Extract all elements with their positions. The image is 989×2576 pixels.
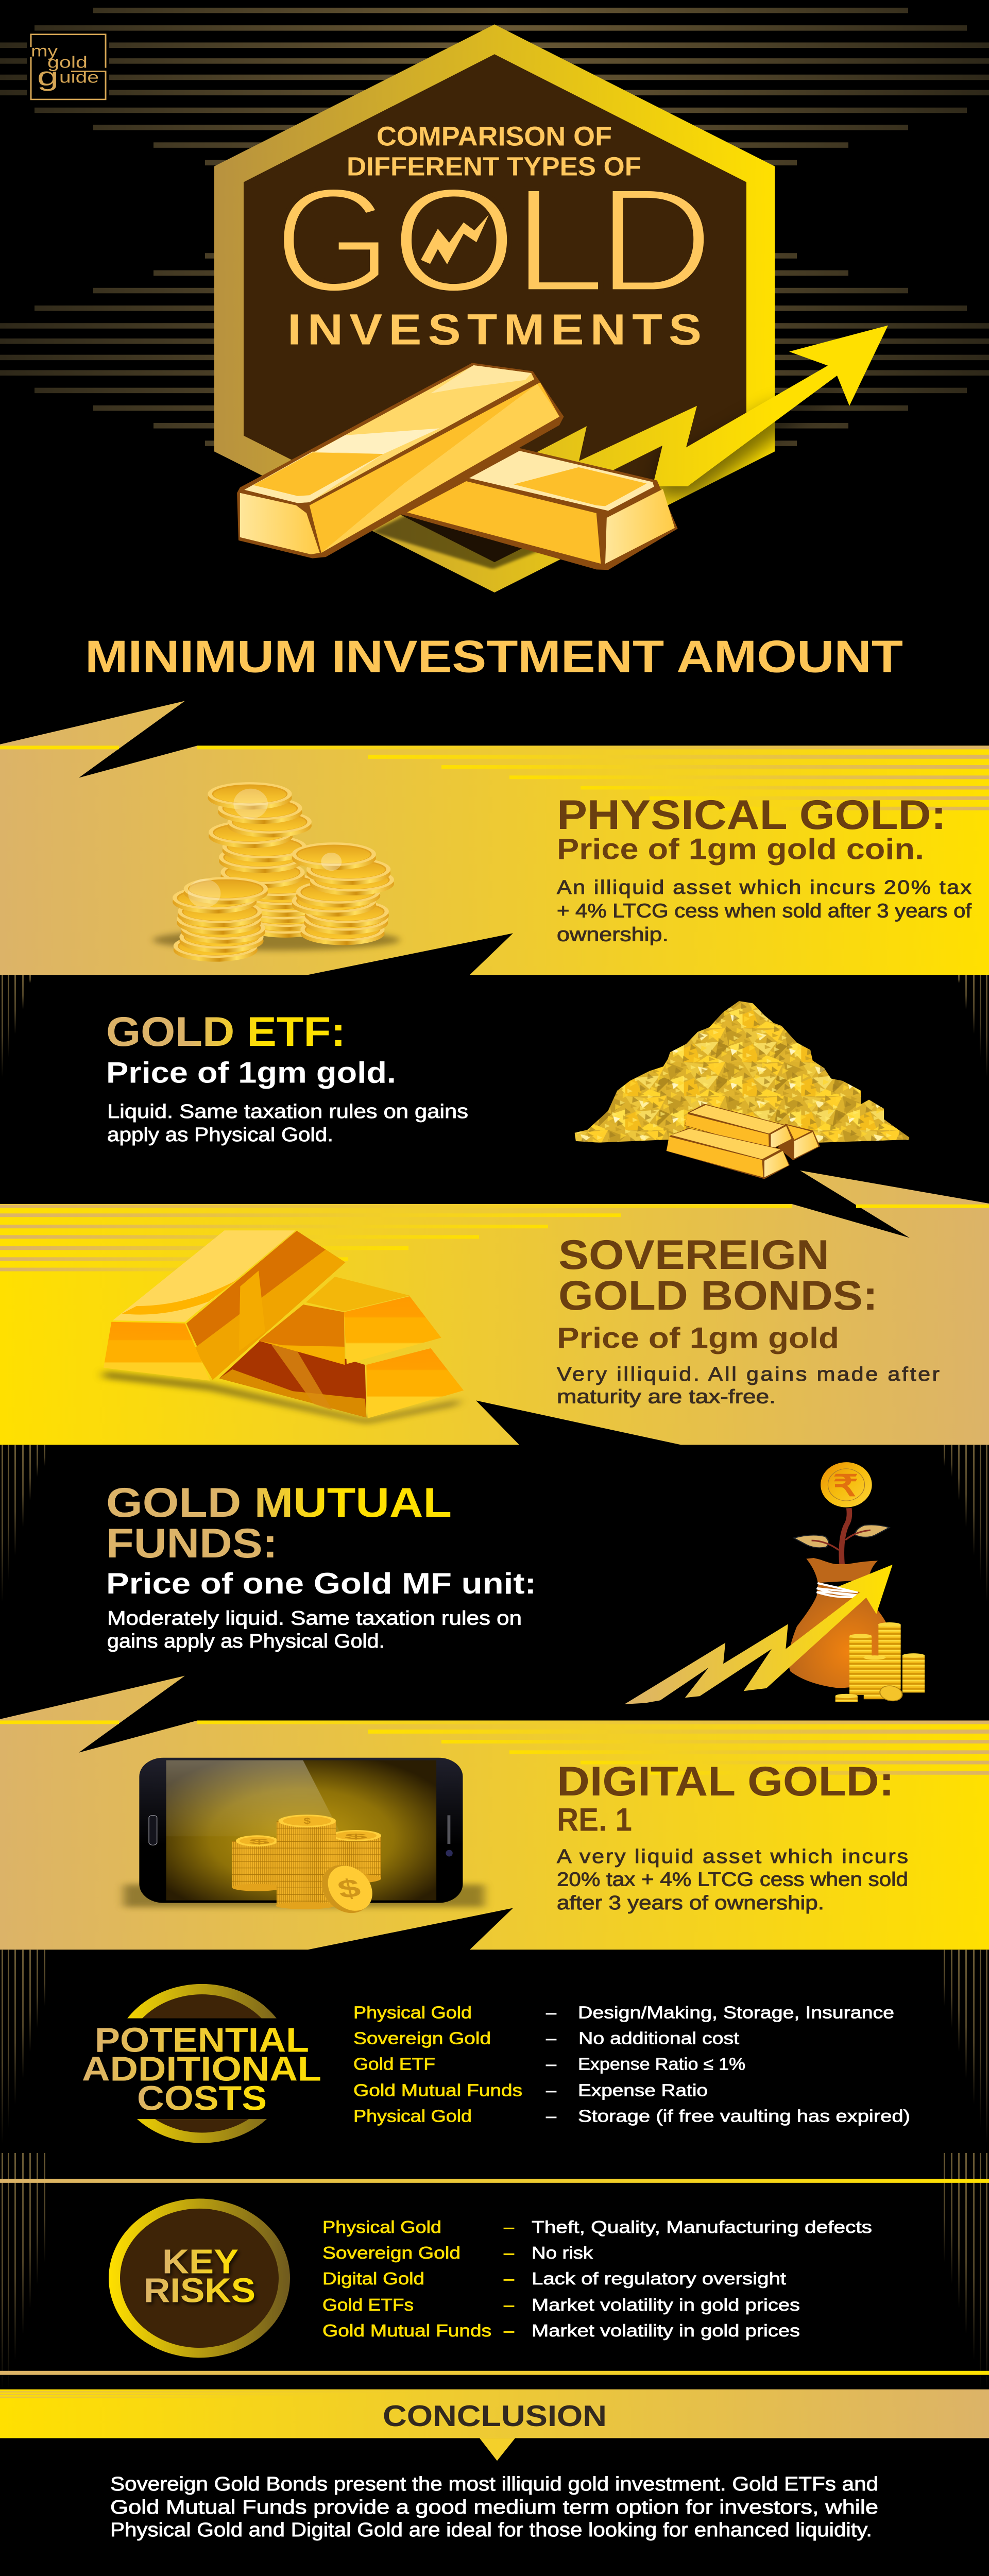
divider bar bbox=[0, 2371, 989, 2375]
badge title: KEY bbox=[162, 2243, 238, 2281]
subheading: price: Price of 1gm gold coin. bbox=[557, 833, 924, 866]
gold bar: upper bbox=[237, 363, 564, 558]
list: gold types bbox=[353, 2003, 522, 2126]
title: GOLD: G bbox=[274, 157, 392, 323]
coin stack: left bbox=[232, 1835, 282, 1891]
icon: stacks of gold coins bbox=[153, 782, 400, 962]
icon: phone with coins bbox=[124, 1758, 484, 1917]
panel: key risks bbox=[109, 2199, 872, 2358]
panel: digital gold bbox=[0, 1676, 989, 1950]
subheading: price: Price of 1gm gold. bbox=[106, 1056, 396, 1090]
description bbox=[107, 1607, 522, 1652]
description: gains apply as Physical Gold. bbox=[107, 1630, 385, 1652]
heading: physical gold: PHYSICAL GOLD: bbox=[557, 792, 946, 838]
conclusion text: Physical Gold and Digital Gold are ideal for those looking for enhanced liquidity. bbox=[110, 2518, 872, 2540]
list: dashes: – bbox=[504, 2295, 514, 2315]
vertical lines under sovereign gold bonds bbox=[2, 1445, 987, 1602]
description: A very liquid asset which incurs bbox=[557, 1845, 908, 1867]
coin: leaning bbox=[314, 1861, 379, 1917]
list: gold types bbox=[322, 2217, 491, 2341]
heading: sovereign gold bonds: SOVEREIGN bbox=[558, 1232, 829, 1278]
description: Liquid. Same taxation rules on gains bbox=[107, 1100, 468, 1123]
list: gold types: Physical Gold bbox=[322, 2217, 441, 2237]
title: comparison of: COMPARISON OF bbox=[377, 121, 612, 151]
list: gold types: Gold Mutual Funds bbox=[353, 2081, 522, 2100]
gold bar: lower bbox=[400, 448, 678, 570]
title: GOLD bbox=[274, 157, 714, 323]
heading: gold mutual funds: FUNDS: bbox=[106, 1520, 278, 1567]
coin: leaning: $ bbox=[334, 1873, 364, 1904]
title: GOLD: L bbox=[512, 157, 606, 323]
panel: gold mutual funds bbox=[106, 1462, 925, 1704]
conclusion text: Sovereign Gold Bonds present the most illiquid gold investment. Gold ETFs and bbox=[110, 2473, 878, 2495]
list: risks: Theft, Quality, Manufacturing defects bbox=[532, 2217, 872, 2237]
badge title bbox=[82, 2021, 321, 2118]
description: Moderately liquid. Same taxation rules on bbox=[107, 1607, 522, 1629]
badge title bbox=[144, 2243, 255, 2310]
description: after 3 years of ownership. bbox=[557, 1892, 824, 1914]
list: dashes: – bbox=[504, 2269, 514, 2289]
title: GOLD: O bbox=[391, 157, 517, 323]
icon: zigzag in the O bbox=[421, 215, 489, 264]
coin stack: center: $ bbox=[303, 1817, 311, 1826]
description bbox=[557, 876, 972, 945]
list: dashes: – bbox=[546, 2055, 556, 2074]
heading: conclusion: CONCLUSION bbox=[383, 2399, 607, 2433]
list: costs: Storage (if free vaulting has expired) bbox=[578, 2107, 910, 2126]
list: costs bbox=[578, 2003, 910, 2126]
list: costs: Expense Ratio ≤ 1% bbox=[578, 2055, 745, 2074]
divider bar bbox=[0, 2179, 989, 2183]
logo: my gold guide: my bbox=[31, 42, 58, 60]
rising arrow bbox=[523, 326, 888, 506]
description: Very illiquid. All gains made after bbox=[557, 1363, 940, 1385]
list: gold types: Digital Gold bbox=[322, 2269, 424, 2289]
icon: gold pile with bars bbox=[575, 1001, 909, 1179]
panel: physical gold bbox=[0, 701, 989, 975]
rising arrow bbox=[624, 1565, 893, 1704]
header background stripes bbox=[0, 8, 989, 446]
description: ownership. bbox=[557, 923, 669, 945]
panel: sovereign gold bonds bbox=[0, 1171, 989, 1445]
icon: stacked gold bars bbox=[104, 1230, 464, 1423]
badge: arcs bbox=[111, 1984, 293, 2143]
list: dashes: – bbox=[546, 2081, 556, 2100]
section heading: minimum investment amount: MINIMUM INVESTMENT AMOUNT bbox=[85, 631, 903, 682]
heading: sovereign gold bonds: GOLD BONDS: bbox=[558, 1273, 878, 1319]
subheading: price: Price of 1gm gold bbox=[557, 1321, 839, 1355]
list: costs: Design/Making, Storage, Insurance bbox=[578, 2003, 894, 2022]
list: risks: Market volatility in gold prices bbox=[532, 2295, 800, 2315]
arrow shadow bbox=[653, 388, 845, 497]
list: gold types: Physical Gold bbox=[353, 2003, 472, 2022]
logo: my gold guide: g bbox=[37, 62, 59, 91]
coin stack: left: $ bbox=[249, 1838, 270, 1845]
list: gold types: Gold ETFs bbox=[322, 2295, 414, 2315]
list: dashes: – bbox=[504, 2321, 514, 2341]
list: gold types: Gold ETF bbox=[353, 2055, 435, 2074]
logo: my gold guide: uide bbox=[59, 69, 99, 87]
list: dashes: – bbox=[504, 2217, 514, 2237]
logo: my gold guide bbox=[27, 31, 109, 103]
subheading: price: Price of one Gold MF unit: bbox=[106, 1567, 536, 1600]
description: + 4% LTCG cess when sold after 3 years of bbox=[557, 900, 972, 922]
money bag bbox=[789, 1584, 890, 1688]
heading: gold mutual funds bbox=[106, 1480, 452, 1567]
badge: circle bbox=[109, 2199, 290, 2358]
list: dashes: – bbox=[546, 2029, 556, 2048]
list: dashes: – bbox=[546, 2107, 556, 2126]
list: dashes bbox=[504, 2217, 514, 2341]
header gold bars bbox=[237, 363, 678, 570]
description: maturity are tax-free. bbox=[557, 1385, 776, 1408]
heading: digital gold: DIGITAL GOLD: bbox=[557, 1758, 894, 1805]
list: risks: No risk bbox=[532, 2243, 593, 2263]
vertical lines: costs section bbox=[2, 1950, 987, 2389]
title: different types of: DIFFERENT TYPES OF bbox=[347, 152, 641, 181]
panel: potential additional costs bbox=[82, 1984, 910, 2143]
badge title: ADDITIONAL bbox=[82, 2050, 321, 2089]
description bbox=[557, 1363, 940, 1408]
subheading: price: RE. 1 bbox=[557, 1802, 632, 1838]
conclusion text bbox=[110, 2473, 878, 2540]
list: dashes: – bbox=[546, 2003, 556, 2022]
icon: money bag plant with arrow and coins bbox=[624, 1462, 925, 1704]
list: gold types: Sovereign Gold bbox=[322, 2243, 461, 2263]
bag tie bbox=[817, 1583, 858, 1597]
list: gold types: Physical Gold bbox=[353, 2107, 472, 2126]
heading: gold mutual funds: GOLD MUTUAL bbox=[106, 1480, 452, 1526]
coin stack: right bbox=[331, 1830, 381, 1883]
plant stem and leaves bbox=[794, 1508, 890, 1583]
coin stacks bbox=[835, 1622, 925, 1704]
rupee coin bbox=[821, 1462, 872, 1507]
list: costs: No additional cost bbox=[578, 2029, 739, 2048]
coin stack: center bbox=[276, 1815, 336, 1909]
vertical lines under physical gold bbox=[2, 975, 987, 1077]
panel: conclusion bbox=[0, 2389, 989, 2540]
conclusion banner bbox=[0, 2389, 989, 2461]
description bbox=[107, 1100, 468, 1145]
list: risks: Market volatility in gold prices bbox=[532, 2321, 800, 2341]
logo: my gold guide: gold bbox=[47, 54, 88, 72]
list: risks bbox=[532, 2217, 872, 2341]
description bbox=[557, 1845, 908, 1914]
description: apply as Physical Gold. bbox=[107, 1123, 333, 1145]
heading: gold etf: GOLD ETF: bbox=[106, 1009, 346, 1055]
badge title: POTENTIAL bbox=[95, 2021, 309, 2059]
rupee coin: ₹ bbox=[833, 1469, 858, 1502]
description: An illiquid asset which incurs 20% tax bbox=[557, 876, 971, 898]
title: GOLD: D bbox=[597, 157, 714, 323]
list: dashes bbox=[546, 2003, 556, 2126]
coin stack: right: $ bbox=[345, 1833, 368, 1840]
conclusion text: Gold Mutual Funds provide a good medium term option for investors, while bbox=[110, 2496, 878, 2518]
list: gold types: Sovereign Gold bbox=[353, 2029, 491, 2048]
badge title: RISKS bbox=[144, 2272, 255, 2310]
list: costs: Expense Ratio bbox=[578, 2081, 708, 2100]
hexagon badge bbox=[214, 24, 775, 592]
badge title: COSTS bbox=[137, 2079, 267, 2118]
list: dashes: – bbox=[504, 2243, 514, 2263]
description: 20% tax + 4% LTCG cess when sold bbox=[557, 1868, 908, 1890]
list: gold types: Gold Mutual Funds bbox=[322, 2321, 491, 2341]
list: risks: Lack of regulatory oversight bbox=[532, 2269, 786, 2289]
heading: sovereign gold bonds bbox=[558, 1232, 878, 1319]
panel: gold etf bbox=[106, 1001, 909, 1179]
title: investments: INVESTMENTS bbox=[287, 306, 702, 354]
